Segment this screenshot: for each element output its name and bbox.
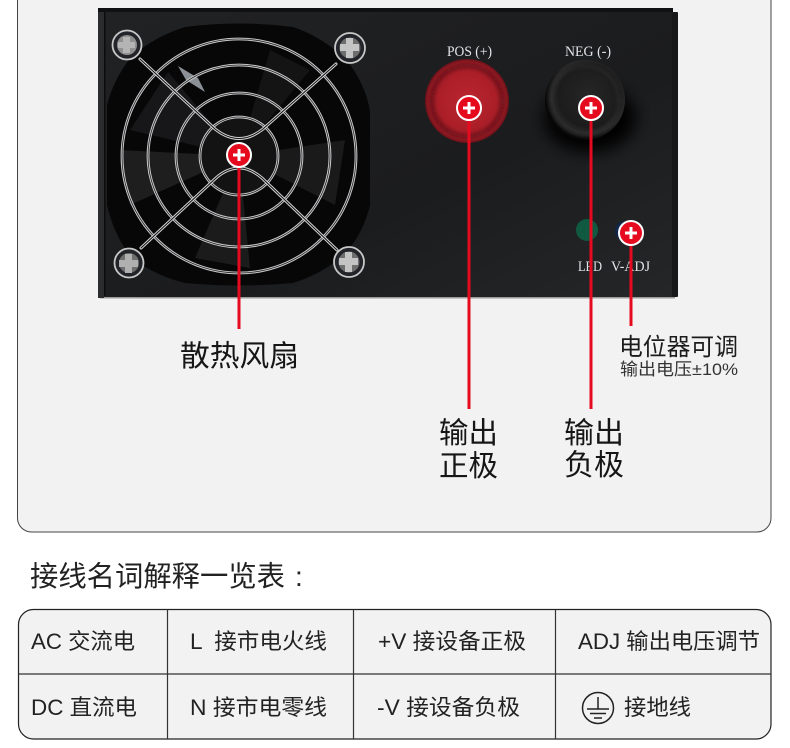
row 2: DC 直流电 <box>31 695 137 720</box>
fan blades <box>120 50 345 268</box>
adjust knob <box>615 221 635 241</box>
row 1: ADJ 输出电压调节 <box>578 629 760 654</box>
marker: negative <box>579 96 603 120</box>
heading: glossary title: : <box>295 561 303 592</box>
black knob <box>544 60 636 152</box>
label: cooling fan: 散热风扇 <box>180 340 299 373</box>
guard rings <box>122 39 356 273</box>
label: potentiometer <box>619 334 738 379</box>
screw: top left <box>112 30 142 60</box>
heading: glossary title: 接线名词解释一览表 <box>30 561 285 593</box>
marker: positive <box>457 96 481 120</box>
label: positive output: 正极 <box>439 450 498 483</box>
marker: voltage adjust <box>619 221 643 245</box>
row 2 <box>31 695 691 720</box>
guard arms <box>140 59 337 250</box>
label: positive output <box>439 417 498 483</box>
callout lines <box>238 108 632 409</box>
label: potentiometer: 输出电压±10% <box>620 360 738 379</box>
row 1: L 接市电火线 <box>190 629 327 654</box>
label: potentiometer: 电位器可调 <box>619 334 738 361</box>
fan with wire guard <box>107 24 370 286</box>
LED label: LED <box>578 259 602 275</box>
screw: bottom left <box>114 248 144 278</box>
positive terminal <box>425 44 509 143</box>
LED and V-ADJ indicators <box>576 219 650 275</box>
panel: product photo background <box>18 0 771 532</box>
V-ADJ label: V-ADJ <box>611 259 650 275</box>
power supply chassis <box>98 8 678 298</box>
label: negative output: 输出 <box>564 417 624 450</box>
row 1: +V 接设备正极 <box>378 629 526 654</box>
screw: top right <box>335 33 365 63</box>
row 2: 接地线 <box>624 695 691 720</box>
label: positive output: 输出 <box>439 417 498 450</box>
fan housing <box>107 24 370 286</box>
row 1: AC 交流电 <box>31 629 135 654</box>
NEG label: NEG (-) <box>565 44 611 60</box>
screw: bottom right <box>334 247 364 277</box>
marker: fan <box>227 143 251 167</box>
row 2: N 接市电零线 <box>190 695 327 720</box>
row 2: -V 接设备负极 <box>377 695 520 720</box>
icon: ground symbol <box>582 692 614 724</box>
negative terminal <box>544 44 636 152</box>
red knob <box>425 59 509 143</box>
glossary table <box>18 610 771 739</box>
POS label: POS (+) <box>447 44 492 60</box>
label: negative output: 负极 <box>564 449 624 482</box>
LED light <box>576 219 598 241</box>
row 1 <box>31 629 760 654</box>
label: negative output <box>564 417 624 482</box>
